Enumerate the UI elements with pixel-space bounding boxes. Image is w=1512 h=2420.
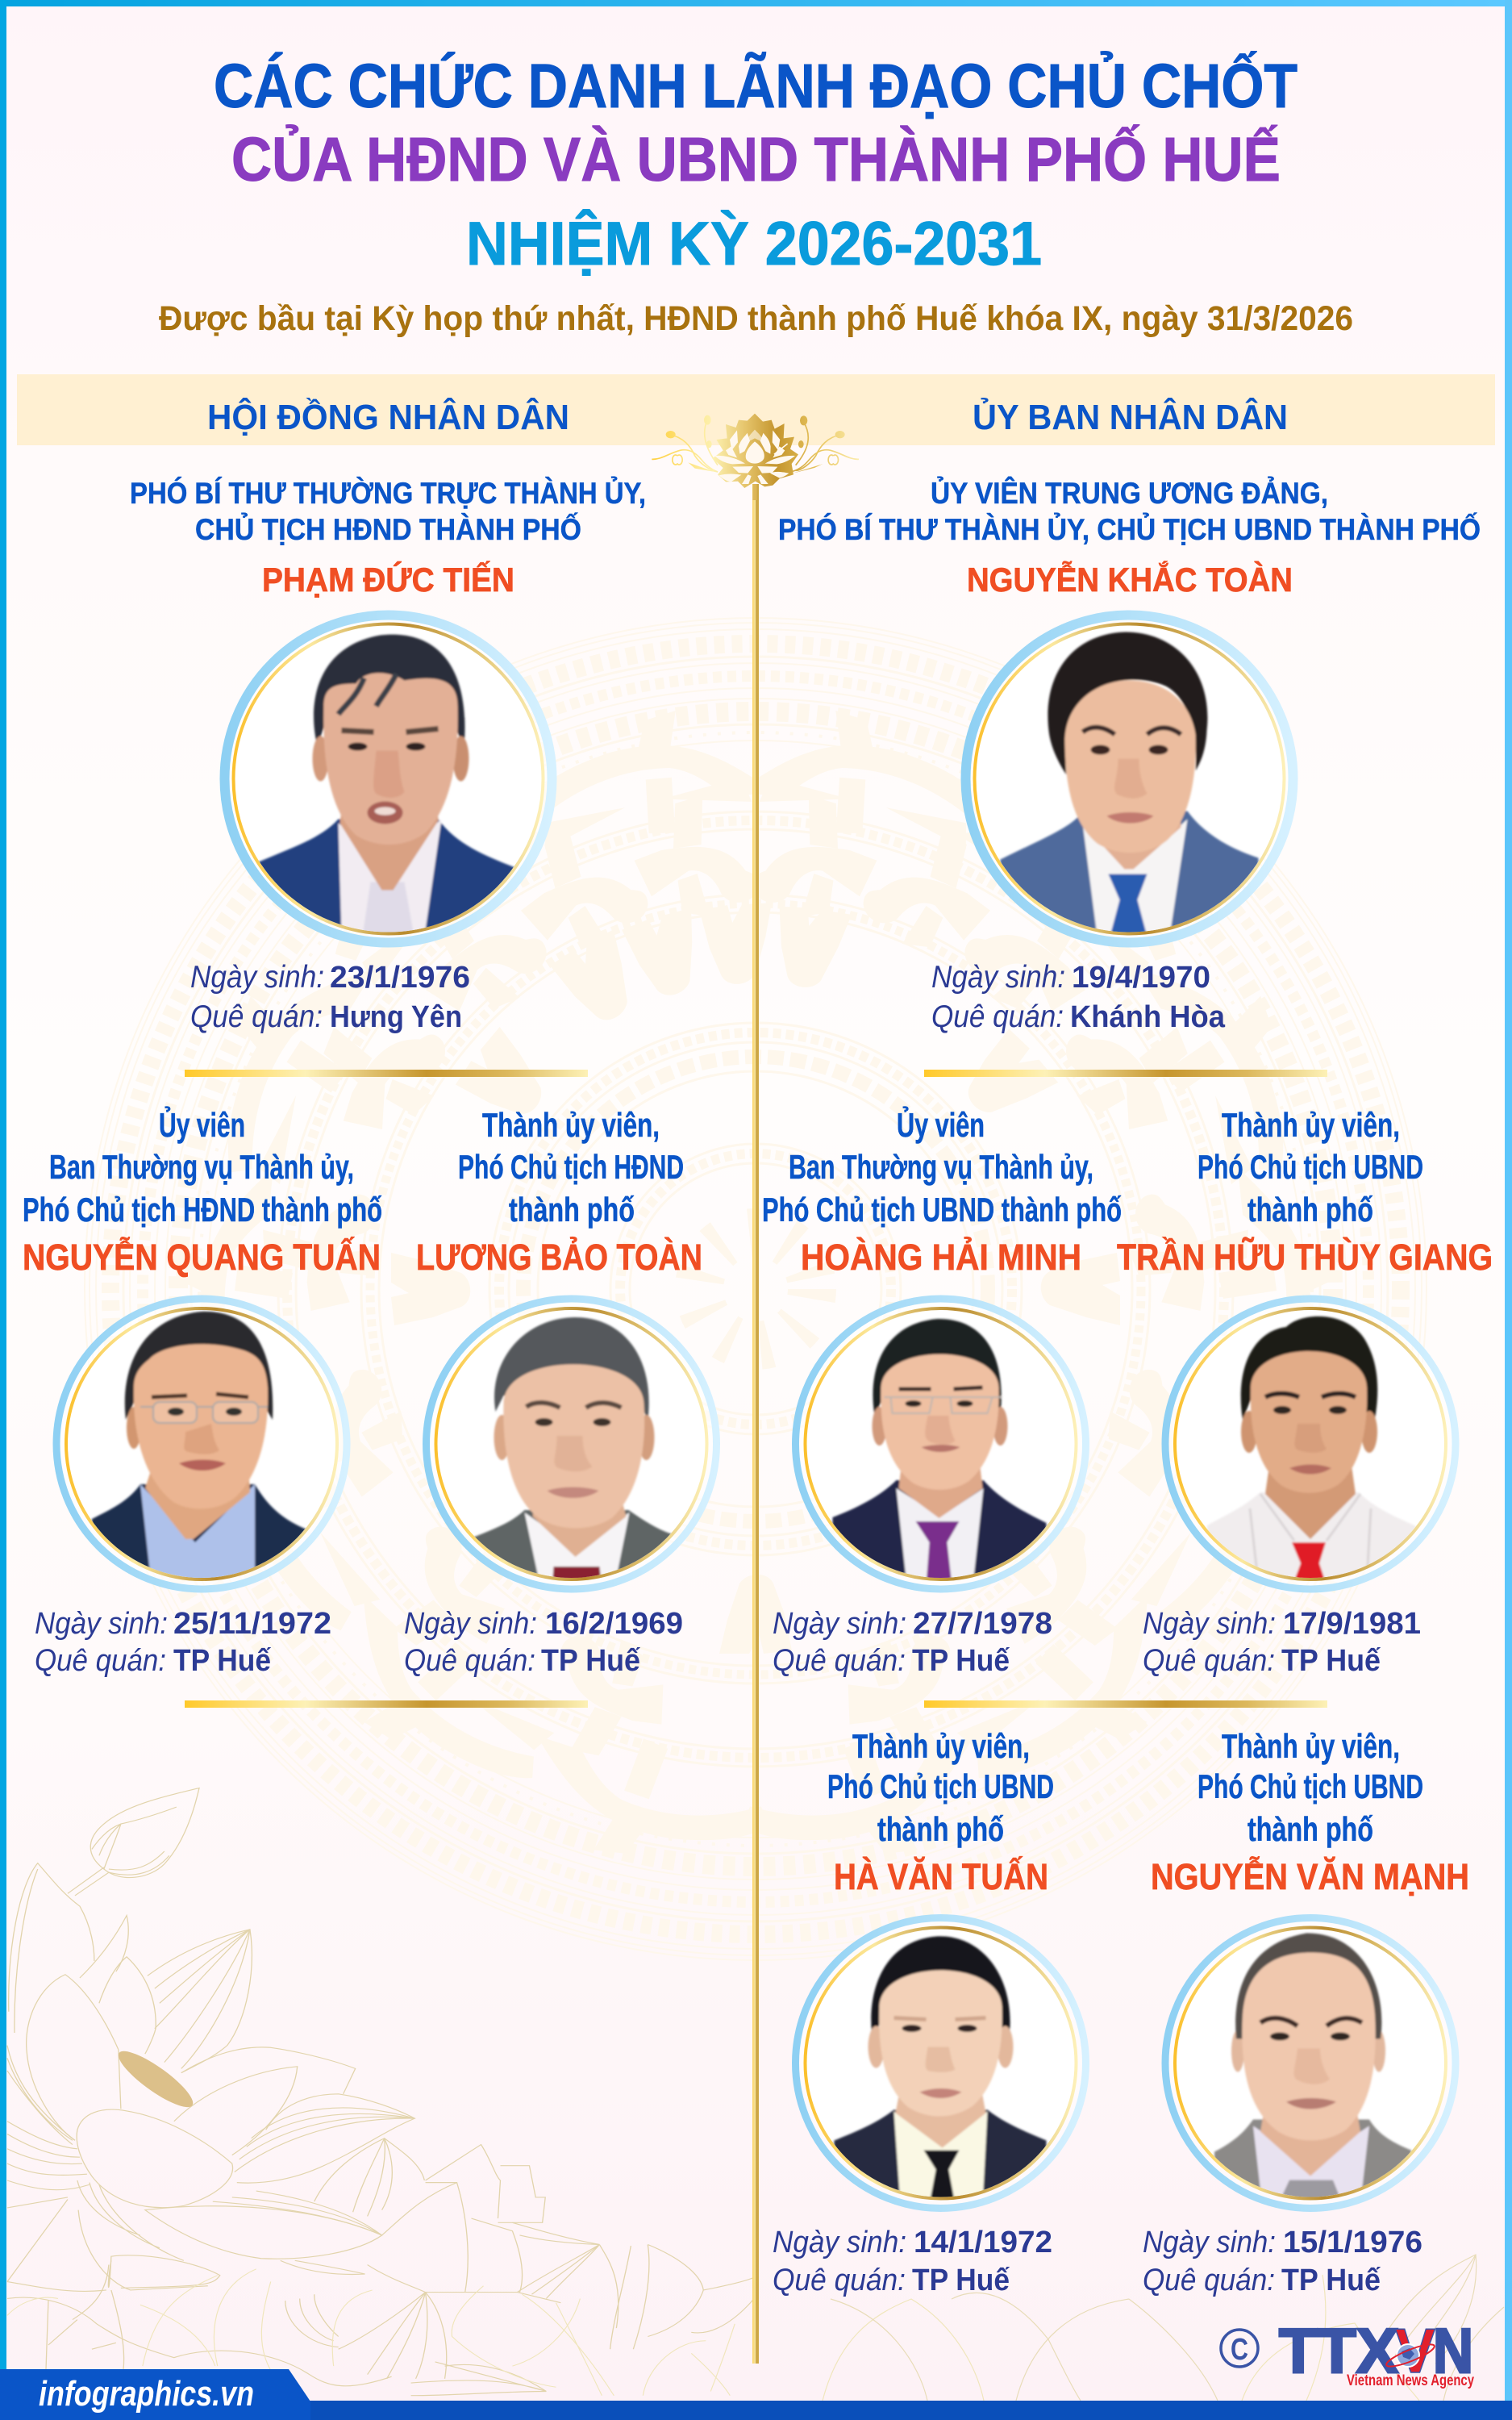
portrait: Nguyễn Quang Tuấn (56, 1299, 347, 1589)
details (35, 1607, 331, 1678)
portrait: Trần Hữu Thùy Giang (1165, 1299, 1456, 1589)
role text (778, 476, 1481, 546)
role text: Thành ủy viên, (852, 1727, 1030, 1765)
subtitle: Được bầu tại Kỳ họp thứ nhất, HĐND thành phố Huế khóa IX, ngày 31/3/2026 (159, 299, 1353, 338)
details: 14/1/1972 (914, 2226, 1052, 2259)
panel: Nguyễn Quang Tuấn (23, 1105, 382, 1678)
portrait: Nguyễn Khắc Toàn (966, 615, 1293, 942)
role text: Ban Thường vụ Thành ủy, (789, 1148, 1093, 1186)
role text (23, 1105, 382, 1229)
divider row 1 right (924, 1070, 1327, 1077)
TTXVN logo: TTX (1279, 2315, 1398, 2386)
role text: Thành ủy viên, (1222, 1106, 1400, 1144)
heading: People's Committee: ỦY BAN NHÂN DÂN (973, 396, 1288, 437)
details: Ngày sinh: (773, 2226, 906, 2259)
role text (762, 1105, 1122, 1229)
footer bar (0, 2369, 1512, 2420)
role text: Ban Thường vụ Thành ủy, (49, 1148, 354, 1186)
panel: Hội đồng nhân dân chairman (130, 476, 646, 1034)
role text: Phó Chủ tịch UBND (827, 1767, 1054, 1805)
column header band (17, 374, 1495, 445)
details: Quê quán: (1143, 2264, 1275, 2297)
TTXVN logo: V (1395, 2315, 1435, 2386)
details: Ngày sinh: (931, 960, 1065, 995)
details: Ngày sinh: (190, 960, 324, 995)
details (404, 1607, 683, 1678)
panel: Trần Hữu Thùy Giang (1117, 1106, 1493, 1678)
role text: Thành ủy viên, (482, 1106, 660, 1144)
details: TP Huế (541, 1644, 641, 1678)
name: NGUYỄN QUANG TUẤN (23, 1237, 381, 1278)
details: 25/11/1972 (173, 1607, 331, 1641)
details: Quê quán: (35, 1644, 166, 1678)
divider row 2 right (924, 1700, 1327, 1708)
role text: thành phố (1248, 1191, 1373, 1229)
role text: Ủy viên (159, 1105, 245, 1144)
role text: thành phố (1248, 1810, 1373, 1848)
role text (1198, 1106, 1423, 1229)
panel: Ủy ban nhân dân chairman (778, 476, 1481, 1034)
details: Ngày sinh: (404, 1607, 537, 1641)
details: 23/1/1976 (330, 961, 470, 995)
role text (458, 1106, 684, 1229)
name: NGUYỄN KHẮC TOÀN (967, 560, 1293, 599)
divider row 2 left (185, 1700, 588, 1708)
background: lotus line art, lower left (7, 1788, 754, 2396)
details: TP Huế (912, 1644, 1010, 1678)
role text: CHỦ TỊCH HĐND THÀNH PHỐ (195, 512, 581, 546)
portrait: Phạm Đức Tiến (224, 615, 552, 942)
role text (130, 476, 646, 546)
panel: Nguyễn Văn Mạnh (1143, 1727, 1469, 2297)
details: Ngày sinh: (1143, 2226, 1276, 2259)
title (159, 51, 1353, 338)
details (1143, 2226, 1422, 2297)
details: Khánh Hòa (1070, 1000, 1226, 1034)
details: Quê quán: (404, 1644, 535, 1678)
details: TP Huế (912, 2264, 1010, 2297)
portrait: Nguyễn Văn Mạnh (1165, 1918, 1456, 2209)
heading: People's Council: HỘI ĐỒNG NHÂN DÂN (207, 396, 569, 437)
TTXVN logo (1279, 2315, 1474, 2389)
details: TP Huế (1281, 1644, 1381, 1678)
details: 16/2/1969 (545, 1607, 683, 1641)
details: TP Huế (173, 1644, 272, 1678)
role text: Phó Chủ tịch UBND (1198, 1148, 1423, 1186)
portrait: Lương Bảo Toàn (426, 1299, 716, 1589)
role text: Phó Chủ tịch UBND thành phố (762, 1191, 1122, 1229)
role text: Phó Chủ tịch HĐND thành phố (23, 1191, 382, 1229)
details: Ngày sinh: (35, 1607, 168, 1641)
copyright mark (1221, 2330, 1258, 2367)
icon: globe (1385, 2341, 1436, 2370)
panel: Hà Văn Tuấn (773, 1727, 1085, 2297)
details: Ngày sinh: (773, 1607, 906, 1641)
background: lotus line art, lower right (823, 2255, 1504, 2401)
role text: Phó Chủ tịch HĐND (458, 1148, 684, 1186)
details (773, 2226, 1052, 2297)
copyright mark: C (1231, 2333, 1248, 2367)
details: Hưng Yên (330, 1000, 462, 1034)
role text: Ủy viên (897, 1105, 985, 1144)
role text: Thành ủy viên, (1222, 1727, 1400, 1765)
divider row 1 left (185, 1070, 588, 1077)
portrait: Hà Văn Tuấn (795, 1918, 1085, 2209)
role text: thành phố (509, 1191, 635, 1229)
name: LƯƠNG BẢO TOÀN (416, 1237, 702, 1278)
details (190, 960, 470, 1034)
panel: Hoàng Hải Minh (762, 1105, 1122, 1678)
details: Quê quán: (931, 999, 1064, 1034)
name: HOÀNG HẢI MINH (801, 1237, 1081, 1278)
details: Quê quán: (773, 2264, 906, 2297)
details: 27/7/1978 (913, 1607, 1052, 1641)
title line 1: CÁC CHỨC DANH LÃNH ĐẠO CHỦ CHỐT (214, 51, 1297, 121)
details: TP Huế (1281, 2264, 1381, 2297)
name: NGUYỄN VĂN MẠNH (1151, 1856, 1469, 1897)
site name: infographics.vn (39, 2374, 254, 2414)
central vertical gold line (752, 484, 759, 2364)
details: 15/1/1976 (1283, 2226, 1422, 2259)
role text: thành phố (877, 1810, 1004, 1848)
icon: golden lotus (652, 414, 859, 500)
details: Ngày sinh: (1143, 1607, 1276, 1641)
name: HÀ VĂN TUẤN (834, 1856, 1048, 1897)
role text: ỦY VIÊN TRUNG ƯƠNG ĐẢNG, (931, 476, 1328, 510)
details: Quê quán: (1143, 1644, 1275, 1678)
portrait: Hoàng Hải Minh (795, 1299, 1085, 1589)
agency caption: Vietnam News Agency (1347, 2372, 1474, 2389)
details: Quê quán: (773, 1644, 906, 1678)
role text: PHÓ BÍ THƯ THƯỜNG TRỰC THÀNH ỦY, (130, 476, 646, 510)
title line 2: CỦA HĐND VÀ UBND THÀNH PHỐ HUẾ (231, 124, 1281, 194)
background: Dong Son bronze drum pattern (85, 618, 1427, 1960)
role text (1198, 1727, 1423, 1848)
details: 17/9/1981 (1283, 1607, 1421, 1641)
details: Quê quán: (190, 999, 323, 1034)
panel: Lương Bảo Toàn (404, 1106, 716, 1678)
TTXVN logo: N (1433, 2315, 1473, 2386)
name: PHẠM ĐỨC TIẾN (262, 560, 514, 599)
role text: Phó Chủ tịch UBND (1198, 1767, 1423, 1805)
role text (827, 1727, 1054, 1848)
title line 3: NHIỆM KỲ 2026-2031 (466, 209, 1042, 278)
details (931, 960, 1226, 1034)
details (773, 1607, 1052, 1678)
details (1143, 1607, 1421, 1678)
details: 19/4/1970 (1072, 961, 1210, 995)
